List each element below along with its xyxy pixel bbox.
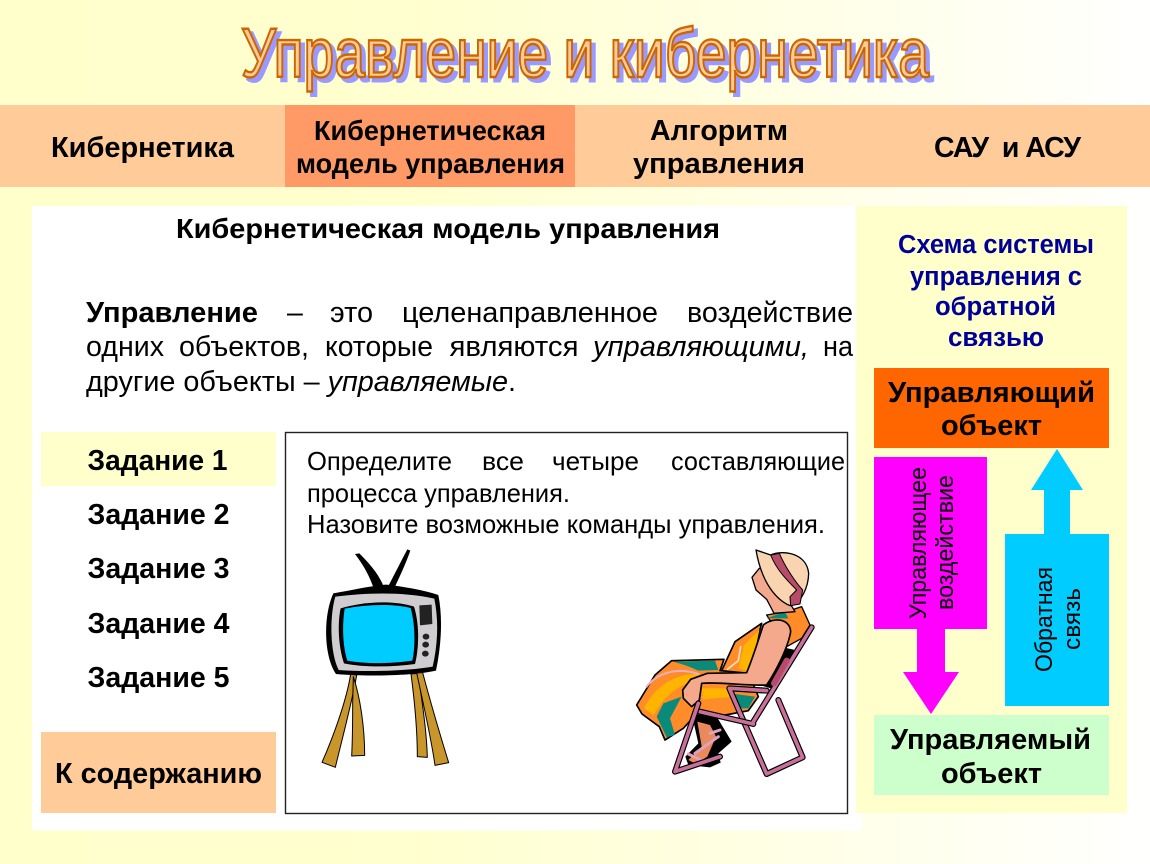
task 3: Задание 3 [88,553,230,585]
neck and face [752,568,795,613]
task text: все [482,446,524,476]
body [326,585,441,676]
black shadow behind legs [685,713,732,767]
task text [307,446,845,539]
task box [286,432,848,814]
definition text: управляющими, [591,331,809,363]
nav item: Алгоритм управления: управления [633,148,805,180]
definition text: – [287,297,303,329]
nav item: Алгоритм управления: Алгоритм [650,115,788,147]
hat [756,550,809,606]
scheme heading: связью [948,324,1044,352]
button: back to contents: К содержанию [55,758,262,790]
task text: процесса управления. [307,478,570,508]
definition text: одних [86,331,164,363]
definition text: Управление [86,297,258,329]
navigation bar [0,105,1150,187]
nav item: Алгоритм управления [633,115,805,180]
button: back to contents [41,732,276,813]
task 1 highlighted [41,432,276,486]
shadow under arm [753,647,795,690]
nav item: Кибернетика: Кибернетика [51,132,235,164]
task 2: Задание 2 [88,499,230,531]
box: controlling object: Управляющий [888,377,1095,409]
arrow: control action [874,457,987,714]
box: controlled object: объект [941,758,1042,790]
arrow: feedback [1005,449,1109,706]
box: controlling object: объект [941,410,1042,442]
task 4: Задание 4 [88,608,230,640]
definition text [86,297,853,398]
chair rear frame [729,688,803,774]
nav item: active Кибернетическая модель управления: модель управления [296,148,565,179]
arrow: control action: Управляющее [905,467,932,619]
controls [419,605,432,625]
skirt [637,659,758,740]
definition text: это [330,297,373,329]
back of dress [767,607,810,647]
task text: составляющие [671,446,845,476]
scheme heading: управления с [910,263,1082,291]
panel: main content [32,206,862,830]
definition text: целенаправленное [402,297,658,329]
definition text: являются [450,331,578,363]
scheme heading [898,231,1094,352]
screen [339,602,418,666]
definition text: объектов, [179,331,309,363]
icon: television [322,549,449,767]
box: controlled object: Управляемый [890,724,1091,756]
definition text: которые [325,331,433,363]
task 1 highlighted: Задание 1 [88,445,228,477]
task text: четыре [552,446,639,476]
scheme heading: обратной [935,293,1056,321]
arm and shoulder [683,620,791,707]
task text: Назовите возможные команды управления. [307,509,825,539]
icon: seated woman in a chair [637,550,812,774]
task 5: Задание 5 [88,662,230,694]
task text: Определите [307,446,452,476]
task list [41,432,276,694]
title: Управление и кибернетика [245,18,933,96]
arrow: feedback: связь [1059,588,1086,650]
definition text: на [823,331,853,363]
nav item: САУ и АСУ: САУ и АСУ [934,132,1081,164]
arrow: control action: воздействие [932,475,959,610]
legs and sandals [688,722,716,764]
chair back and seat [675,627,812,772]
legs [322,674,357,767]
box: controlled object [874,715,1109,795]
nav item: active Кибернетическая модель управления: Кибернетическая [314,115,546,146]
definition text: другие объекты – управляемые. [86,366,516,398]
upper dress [722,623,762,673]
definition text: воздействие [687,297,853,329]
scheme heading: Схема системы [898,231,1094,259]
heading: Кибернетическая модель управления [176,213,720,244]
panel: feedback control scheme [856,206,1127,813]
title: Управление и кибернетика [241,14,929,92]
antennas [355,553,383,589]
box: controlling object [874,368,1109,448]
arrow: feedback: Обратная [1031,567,1058,672]
nav item: active Кибернетическая модель управления [285,105,575,187]
